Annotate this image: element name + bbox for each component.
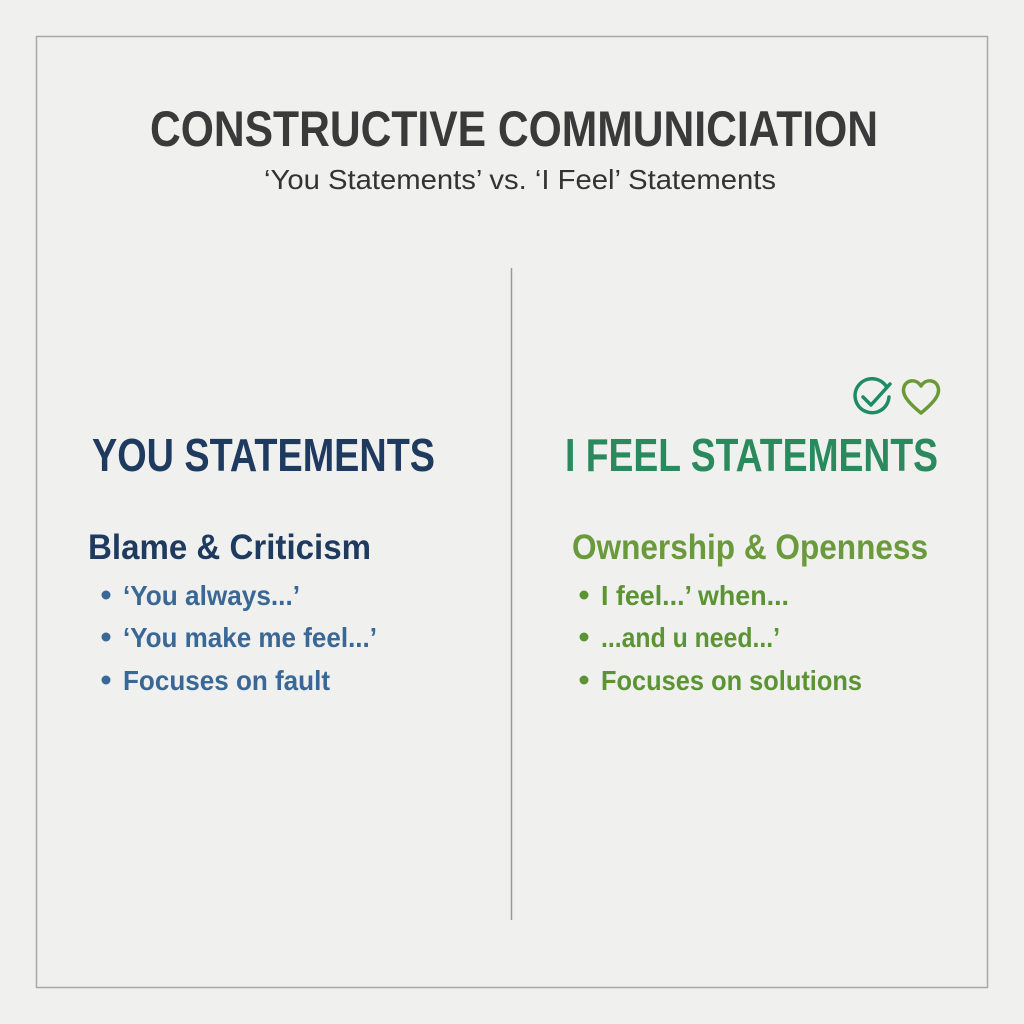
bullet list: i feel statements <box>580 580 862 696</box>
heading: you statements: YOU STATEMENTS <box>92 429 435 481</box>
icon: heart <box>903 381 939 413</box>
bullet list: you statements: ‘You always...’ <box>123 580 300 611</box>
heading: i feel statements: I FEEL STATEMENTS <box>565 429 938 481</box>
bullet list: you statements: ‘You make me feel...’ <box>123 622 377 653</box>
bullet list: i feel statements: Focuses on solutions <box>601 665 862 696</box>
panel: you statements <box>88 429 435 696</box>
panel: i feel statements <box>565 379 939 696</box>
subtitle: ‘You Statements’ vs. ‘I Feel’ Statements <box>264 164 776 195</box>
bullet list: you statements <box>102 580 377 696</box>
bullet list: i feel statements: ...and u need...’ <box>601 622 780 653</box>
bullet list: i feel statements: I feel...’ when... <box>601 580 789 611</box>
icon: check circle <box>855 379 890 413</box>
subheading: ownership & openness: Ownership & Openness <box>572 528 928 567</box>
subheading: blame & criticism: Blame & Criticism <box>88 528 371 567</box>
bullet list: you statements: Focuses on fault <box>123 665 330 696</box>
title: CONSTRUCTIVE COMMUNICIATION <box>150 101 878 157</box>
